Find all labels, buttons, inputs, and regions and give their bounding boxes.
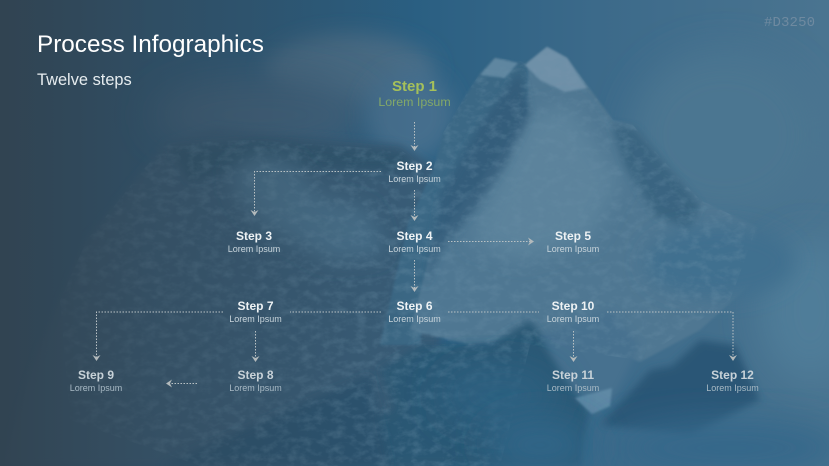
- rock texture: [139, 60, 744, 466]
- arrow: step 4 to step 6: [410, 260, 418, 292]
- low clouds: [440, 365, 560, 425]
- arrow: step 8 to step 9: [166, 380, 197, 388]
- step 1: Step 1: [392, 78, 437, 95]
- step 1: [378, 78, 451, 109]
- step 2: Lorem Ipsum: [388, 174, 441, 184]
- step 11: [547, 368, 599, 393]
- step 11: Lorem Ipsum: [547, 383, 599, 393]
- step 10: Lorem Ipsum: [547, 314, 599, 324]
- step 7: [229, 299, 282, 324]
- step 3: Lorem Ipsum: [228, 244, 280, 254]
- summit snow: [525, 47, 587, 92]
- arrow: step 2 to step 3: [250, 172, 381, 216]
- arrow: step 7 to step 8: [252, 331, 260, 362]
- step 6: Step 6: [396, 299, 433, 313]
- step 11: Step 11: [552, 368, 594, 382]
- step 10: [547, 299, 599, 324]
- step 7: Step 7: [237, 299, 274, 313]
- step 5: Lorem Ipsum: [547, 244, 599, 254]
- step 9: Step 9: [78, 368, 114, 382]
- arrow: step 10 to step 11: [570, 331, 578, 362]
- arrow: step 2 to step 4: [410, 190, 418, 221]
- step 3: [228, 229, 280, 254]
- step 10: Step 10: [552, 299, 595, 313]
- main peak: left face: [380, 58, 528, 345]
- arrow: step 10 to step 12: [607, 312, 737, 361]
- arrow: step 1 to step 2: [410, 122, 418, 151]
- connector: step 6 to step 10: [448, 311, 539, 313]
- step 2: [388, 159, 441, 184]
- step 7: Lorem Ipsum: [229, 314, 282, 324]
- step 3: Step 3: [236, 229, 272, 243]
- pale rock beneath peak: [540, 310, 640, 412]
- clouds in right sky: [630, 50, 820, 220]
- step 8: [229, 368, 282, 393]
- step 5: Step 5: [555, 229, 591, 243]
- step 8: Lorem Ipsum: [229, 383, 282, 393]
- lower dark ridges: [330, 320, 590, 466]
- step 8: Step 8: [237, 368, 274, 382]
- watermark code: #D3250: [764, 15, 815, 31]
- step 4: [388, 229, 441, 254]
- step 12: Step 12: [711, 368, 754, 382]
- step 2: Step 2: [396, 159, 433, 173]
- step 4: Lorem Ipsum: [388, 244, 441, 254]
- title: Process Infographics: [37, 31, 264, 58]
- step 9: [70, 368, 122, 393]
- main peak: right face: [410, 47, 757, 362]
- left massif: [0, 128, 440, 466]
- cloud above left massif: [265, 34, 435, 106]
- arrow: step 4 to step 5: [448, 238, 534, 246]
- left vignette: [0, 0, 420, 466]
- dark right ridge: [612, 125, 700, 230]
- step 6: Lorem Ipsum: [388, 314, 441, 324]
- arrow: step 7 to step 9: [92, 312, 223, 361]
- connector: step 6 to step 7: [290, 311, 381, 313]
- step 6: [388, 299, 441, 324]
- step 4: Step 4: [396, 229, 433, 243]
- step 1: Lorem Ipsum: [378, 95, 451, 109]
- step 12: Lorem Ipsum: [706, 383, 759, 393]
- bright central face: [470, 105, 620, 260]
- cloud over right shoulder: [645, 226, 795, 298]
- step 5: [547, 229, 599, 254]
- subtitle: Twelve steps: [37, 71, 132, 89]
- step 9: Lorem Ipsum: [70, 383, 122, 393]
- step 12: [706, 368, 759, 393]
